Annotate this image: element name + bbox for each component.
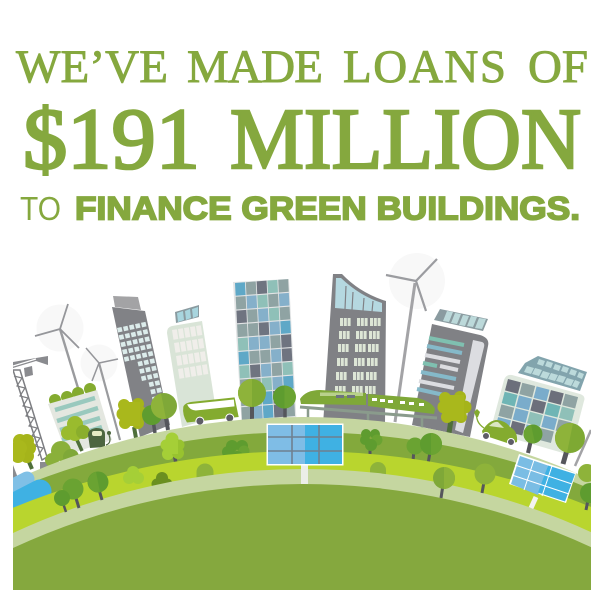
ground: outer pale band [31,417,591,486]
title line 3 lead: TO [20,190,61,227]
train car right [368,394,435,414]
dark bush [152,472,172,490]
title line 1 [16,41,588,93]
lime-band shrubs [123,462,596,490]
lime bush [123,466,144,484]
tree by solar building 2 [555,423,585,464]
wind turbine 2 [86,348,121,440]
lime blob tree [160,432,184,464]
elevated train [300,390,437,428]
illustration [5,253,600,590]
glass mosaic tower [233,279,297,430]
green blob tree [222,440,250,456]
title line 1: LOANS [343,41,506,93]
half tree left [196,464,214,482]
title line 2: $191 [23,90,200,187]
title line 2 [23,90,581,187]
front tree 3 [54,490,70,512]
fuel pump charger [88,428,111,448]
grey windowed tower [112,296,170,437]
olive tree [116,398,148,438]
electric car [474,409,517,446]
front tree 1 [88,472,108,500]
tree left edge [11,434,36,469]
solar roof building [490,356,587,455]
front tree 4 [433,467,455,498]
olive tree right [438,391,472,433]
far right pole [575,430,591,466]
bush by crane [45,441,79,467]
bus [182,397,239,427]
tree beside glass tower 2 [273,386,296,420]
round tree [151,393,177,430]
wind turbine 1 [35,304,84,388]
title line 1: WE’VE [16,41,168,93]
center solar panel [266,424,344,484]
back-band trees [160,429,442,462]
title [16,41,588,227]
ground: inner pale band [13,469,591,590]
ground: lime band [13,452,591,533]
ground: main dome [13,484,591,590]
green roof office building [48,383,112,455]
crane [13,356,48,478]
half tree right [370,462,386,478]
title line 1: MADE [187,41,323,93]
ground: dark green band [40,433,591,507]
green blob tree right [360,429,382,456]
front tree 2 [62,478,84,508]
front trees [54,464,600,512]
skyline trees [11,379,585,469]
title line 3 bold: FINANCE GREEN BUILDINGS. [75,190,580,226]
half bush right edge [578,464,596,482]
tree by solar building 1 [523,424,542,453]
dark green tree [142,405,162,433]
rounded office tower [412,309,488,437]
pale green building [167,305,217,427]
front tree 6 [580,483,600,510]
right solar panel [509,454,576,508]
train car left [300,390,366,405]
title line 2: MILLION [230,90,581,187]
tree beside glass tower 1 [238,379,266,420]
tree by office [61,416,90,451]
twin trees [406,433,442,464]
curved glass tower [323,274,386,425]
wind turbine 3 [386,258,438,422]
title line 1: OF [528,41,588,93]
front tree 5 [474,464,496,493]
water pills [5,479,40,509]
